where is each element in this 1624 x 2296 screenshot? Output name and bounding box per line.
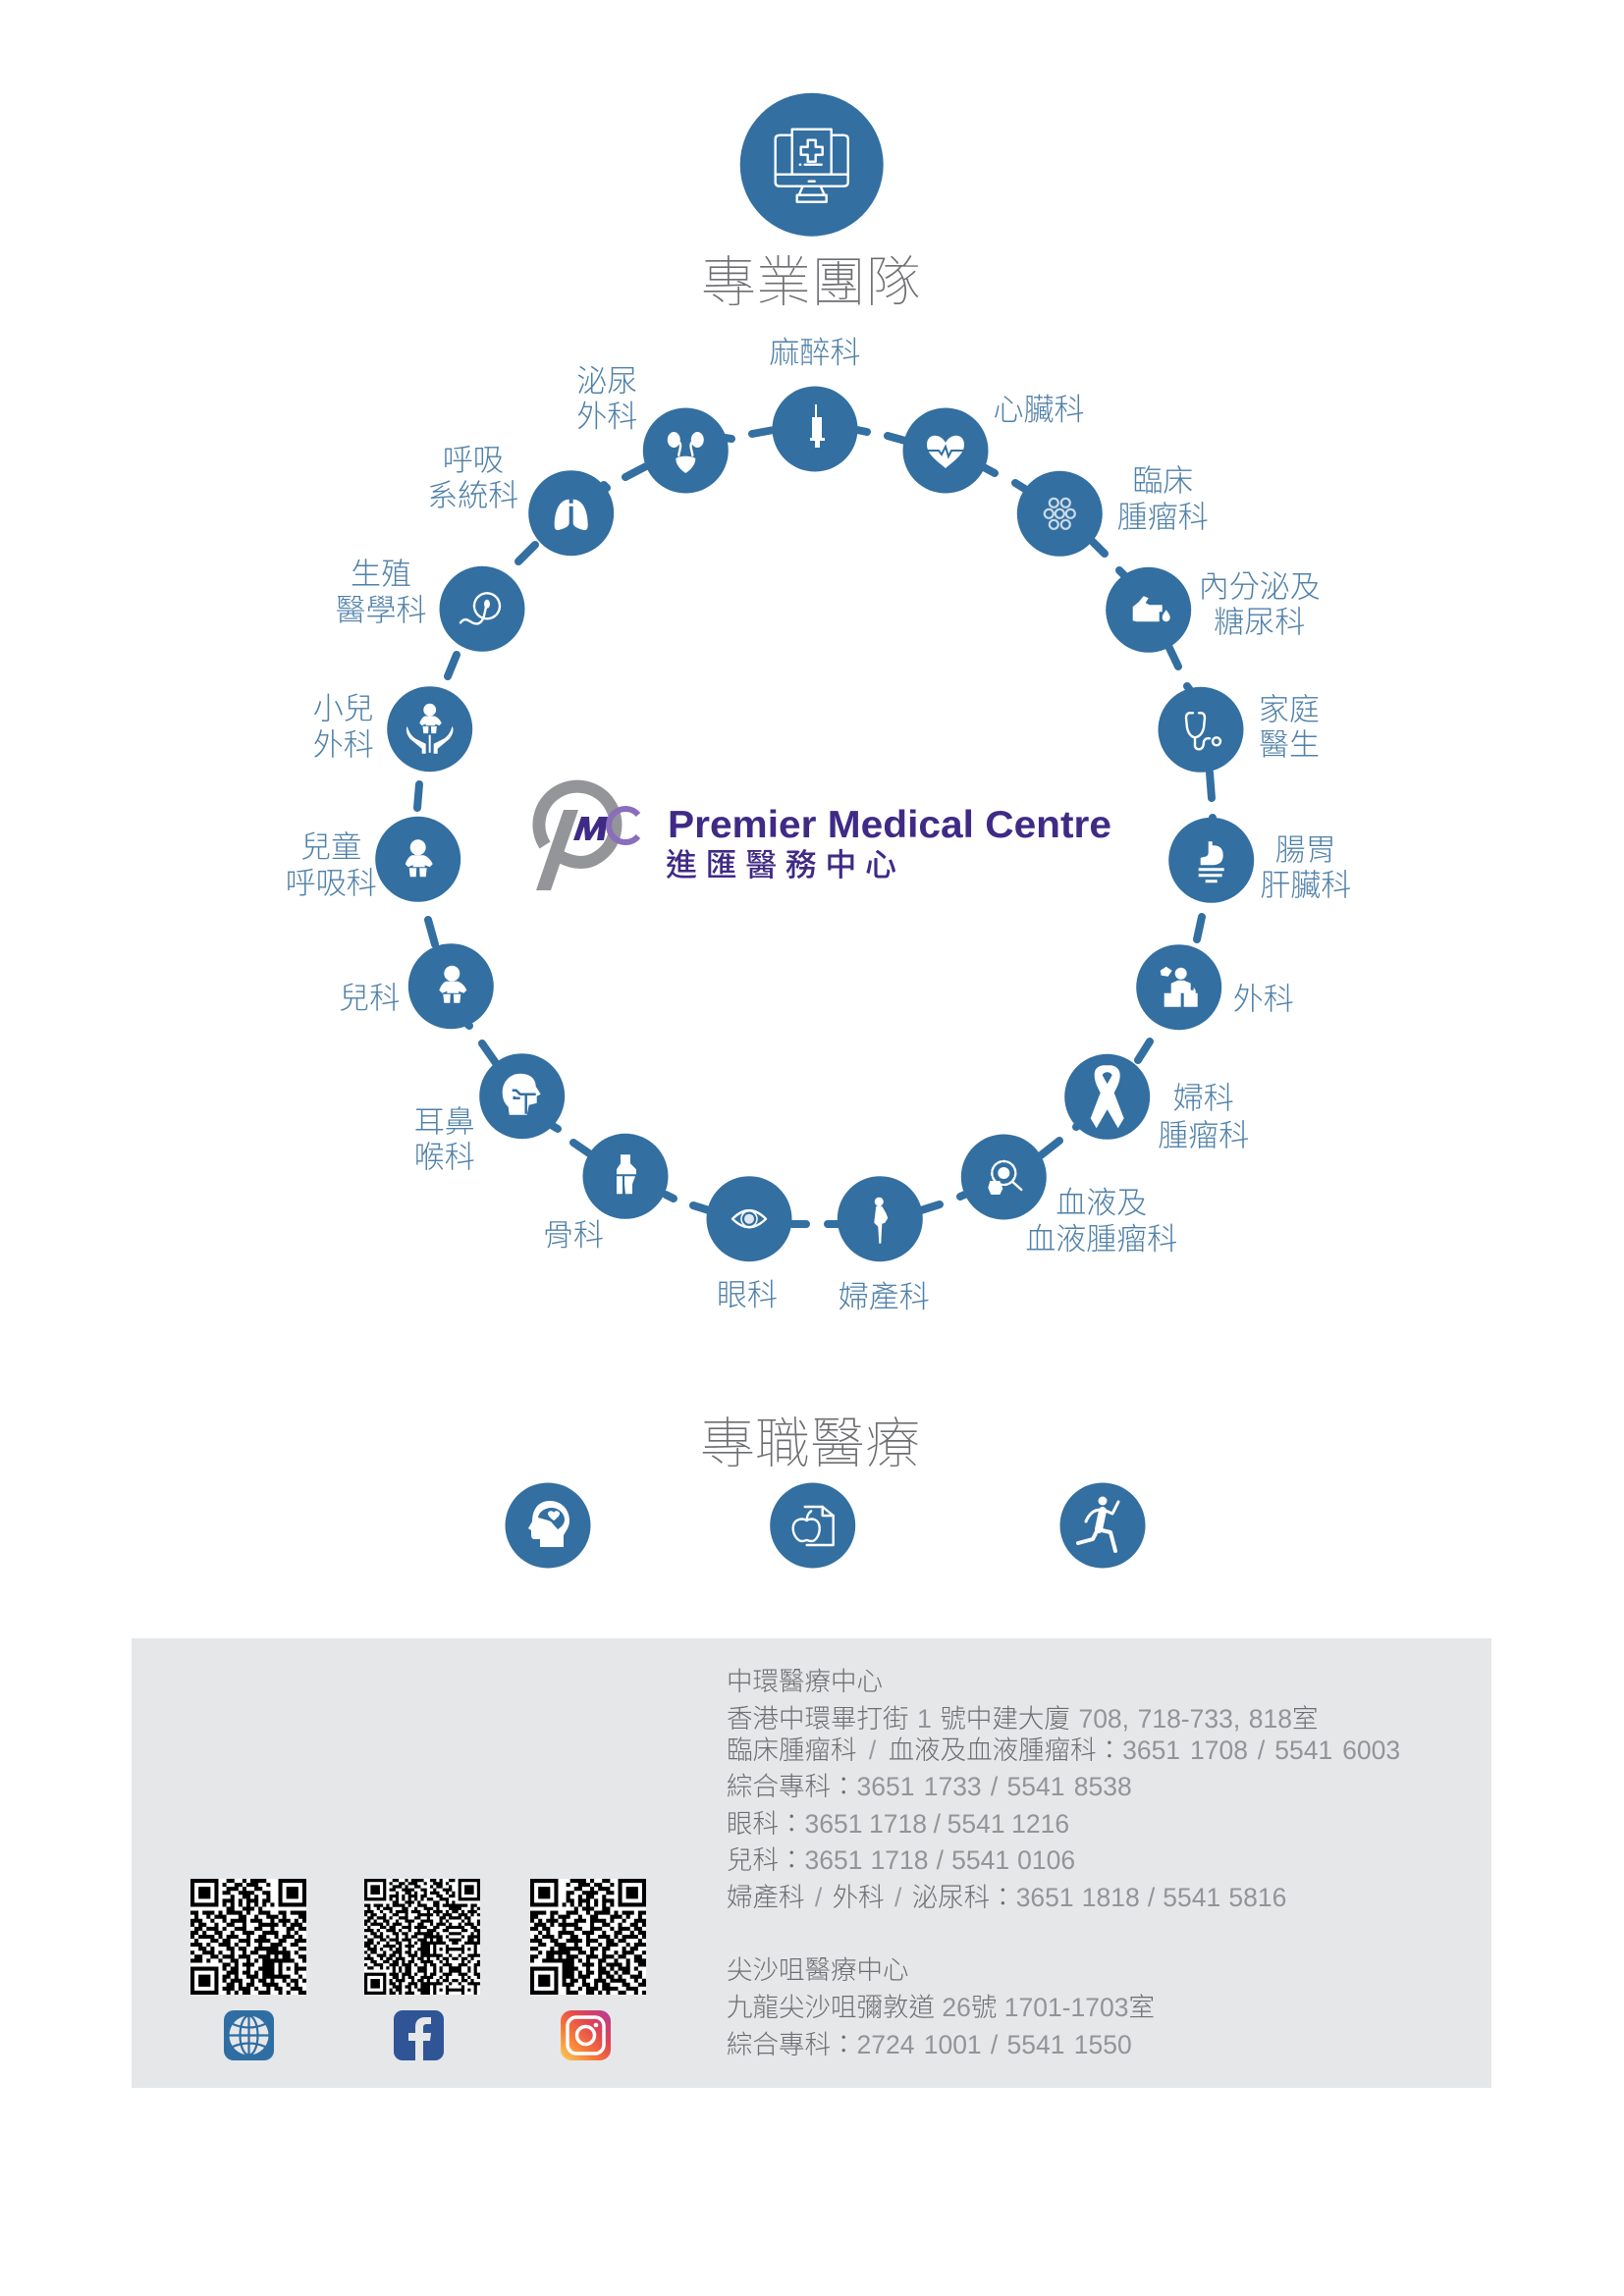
QR code: Facebook (364, 1879, 480, 1995)
icon: medical monitor (740, 93, 884, 237)
label: 家庭 (1259, 692, 1320, 726)
label: 泌尿 (576, 364, 637, 399)
phone line: 綜合專科：2724 1001 / 5541 1550 (727, 2030, 1132, 2059)
label: 骨科 (543, 1218, 604, 1253)
label: 腸胃 (1275, 832, 1336, 867)
node: 心臟科 (903, 393, 1084, 493)
icon: mental health (505, 1482, 591, 1569)
label: 呼吸 (443, 444, 504, 478)
address: 香港中環畢打街 1 號中建大廈 708, 718-733, 818室 (727, 1704, 1318, 1734)
icon: head with airway (503, 1074, 541, 1115)
label: 外科 (1233, 983, 1294, 1017)
phone line: 綜合專科：3651 1733 / 5541 8538 (727, 1772, 1132, 1801)
phone line: 眼科：3651 1718 / 5541 1216 (727, 1809, 1069, 1839)
phone line: 兒科：3651 1718 / 5541 0106 (727, 1845, 1075, 1875)
node: 內分泌及糖尿科 (1106, 567, 1321, 653)
icon: kidneys and bladder (668, 432, 704, 473)
logo Chinese name: 進匯醫務中心 (666, 847, 905, 882)
label: 醫生 (1259, 727, 1320, 762)
node: 臨床腫瘤科 (1017, 463, 1209, 557)
icon: runner (1060, 1482, 1145, 1569)
node: 外科 (1136, 944, 1294, 1030)
logo English name: Premier Medical Centre (668, 804, 1111, 846)
text block: Tsim Sha Tsui medical centre (727, 1955, 1155, 2059)
connector segments (417, 430, 1213, 1224)
label: 臨床 (1132, 463, 1193, 498)
centre name: 中環醫療中心 (727, 1667, 883, 1696)
icon: knee joint (617, 1154, 636, 1194)
label: 喉科 (414, 1141, 475, 1175)
icon: hand and blood drop (1133, 596, 1170, 621)
label: 肝臟科 (1260, 868, 1351, 902)
label: 血液及 (1056, 1186, 1147, 1220)
icon: Instagram (561, 2010, 611, 2060)
icon: awareness ribbon (1091, 1065, 1124, 1128)
QR code: website (190, 1879, 306, 1995)
icon: diet plan (770, 1482, 855, 1569)
label: 外科 (313, 728, 374, 763)
label: 眼科 (717, 1278, 778, 1312)
icon: syringe (810, 404, 825, 448)
label: 呼吸科 (286, 866, 377, 900)
icon: heart with pulse (927, 436, 964, 468)
icon: cells (1045, 499, 1075, 529)
node: 骨科 (543, 1134, 668, 1253)
label: 腫瘤科 (1158, 1118, 1249, 1152)
text block: Central medical centre (727, 1667, 1400, 1912)
label: 外科 (576, 400, 637, 434)
node: 生殖醫學科 (336, 557, 524, 652)
node: 兒科 (339, 943, 494, 1029)
node: 小兒外科 (313, 686, 472, 772)
icon: magnifier over blood cell (988, 1161, 1021, 1195)
icon: child (406, 839, 433, 877)
label: 小兒 (313, 692, 374, 726)
label: 麻醉科 (770, 336, 860, 370)
node: 麻醉科 (770, 336, 860, 471)
label: 心臟科 (994, 393, 1084, 427)
icon: surgeon (1161, 967, 1198, 1007)
label: 婦產科 (839, 1280, 930, 1314)
icon: eye (732, 1210, 766, 1227)
label: 糖尿科 (1214, 605, 1305, 639)
label: 內分泌及 (1199, 569, 1321, 604)
icon: sperm and egg (460, 593, 500, 623)
label: 婦科 (1173, 1081, 1234, 1115)
node: 耳鼻喉科 (414, 1053, 565, 1175)
icon: lungs (555, 500, 588, 530)
icon: stethoscope (1186, 713, 1220, 749)
node: 兒童呼吸科 (286, 817, 460, 902)
QR code: Instagram (530, 1879, 646, 1995)
logo: Premier Medical Centre (536, 786, 1111, 890)
panel: contact information (132, 1638, 1491, 2088)
node: 婦產科 (838, 1176, 930, 1314)
label: 生殖 (351, 557, 411, 591)
label: 耳鼻 (414, 1105, 475, 1140)
label: 兒科 (339, 982, 400, 1016)
phone line: 臨床腫瘤科 / 血液及血液腫瘤科：3651 1708 / 5541 6003 (727, 1735, 1400, 1765)
node: 泌尿外科 (576, 364, 729, 493)
node: 呼吸系統科 (427, 444, 614, 556)
centre name: 尖沙咀醫療中心 (727, 1955, 909, 1985)
icon: baby (439, 966, 466, 1003)
node: 腸胃肝臟科 (1168, 818, 1351, 903)
label: 醫學科 (336, 593, 426, 627)
ring of specialties (286, 336, 1351, 1314)
icon: pregnant woman (874, 1198, 888, 1244)
node: 家庭醫生 (1159, 687, 1320, 773)
heading: 專業團隊: 專業團隊 (701, 251, 921, 313)
node: 血液及血液腫瘤科 (961, 1135, 1177, 1256)
icon: website globe (224, 2010, 274, 2060)
address: 九龍尖沙咀彌敦道 26號 1701-1703室 (727, 1993, 1155, 2022)
icon: baby in hands (406, 704, 454, 754)
icon: Facebook (394, 2010, 444, 2060)
heading: 專職醫療: 專職醫療 (700, 1413, 920, 1474)
icon: stomach (1199, 841, 1224, 882)
label: 腫瘤科 (1117, 500, 1209, 534)
logo mark: PMC (536, 786, 638, 890)
label: 系統科 (427, 479, 518, 513)
label: 兒童 (300, 829, 361, 864)
label: 血液腫瘤科 (1025, 1222, 1177, 1256)
node: 眼科 (707, 1176, 791, 1312)
phone line: 婦產科 / 外科 / 泌尿科：3651 1818 / 5541 5816 (727, 1883, 1286, 1912)
node: 婦科腫瘤科 (1064, 1054, 1249, 1152)
